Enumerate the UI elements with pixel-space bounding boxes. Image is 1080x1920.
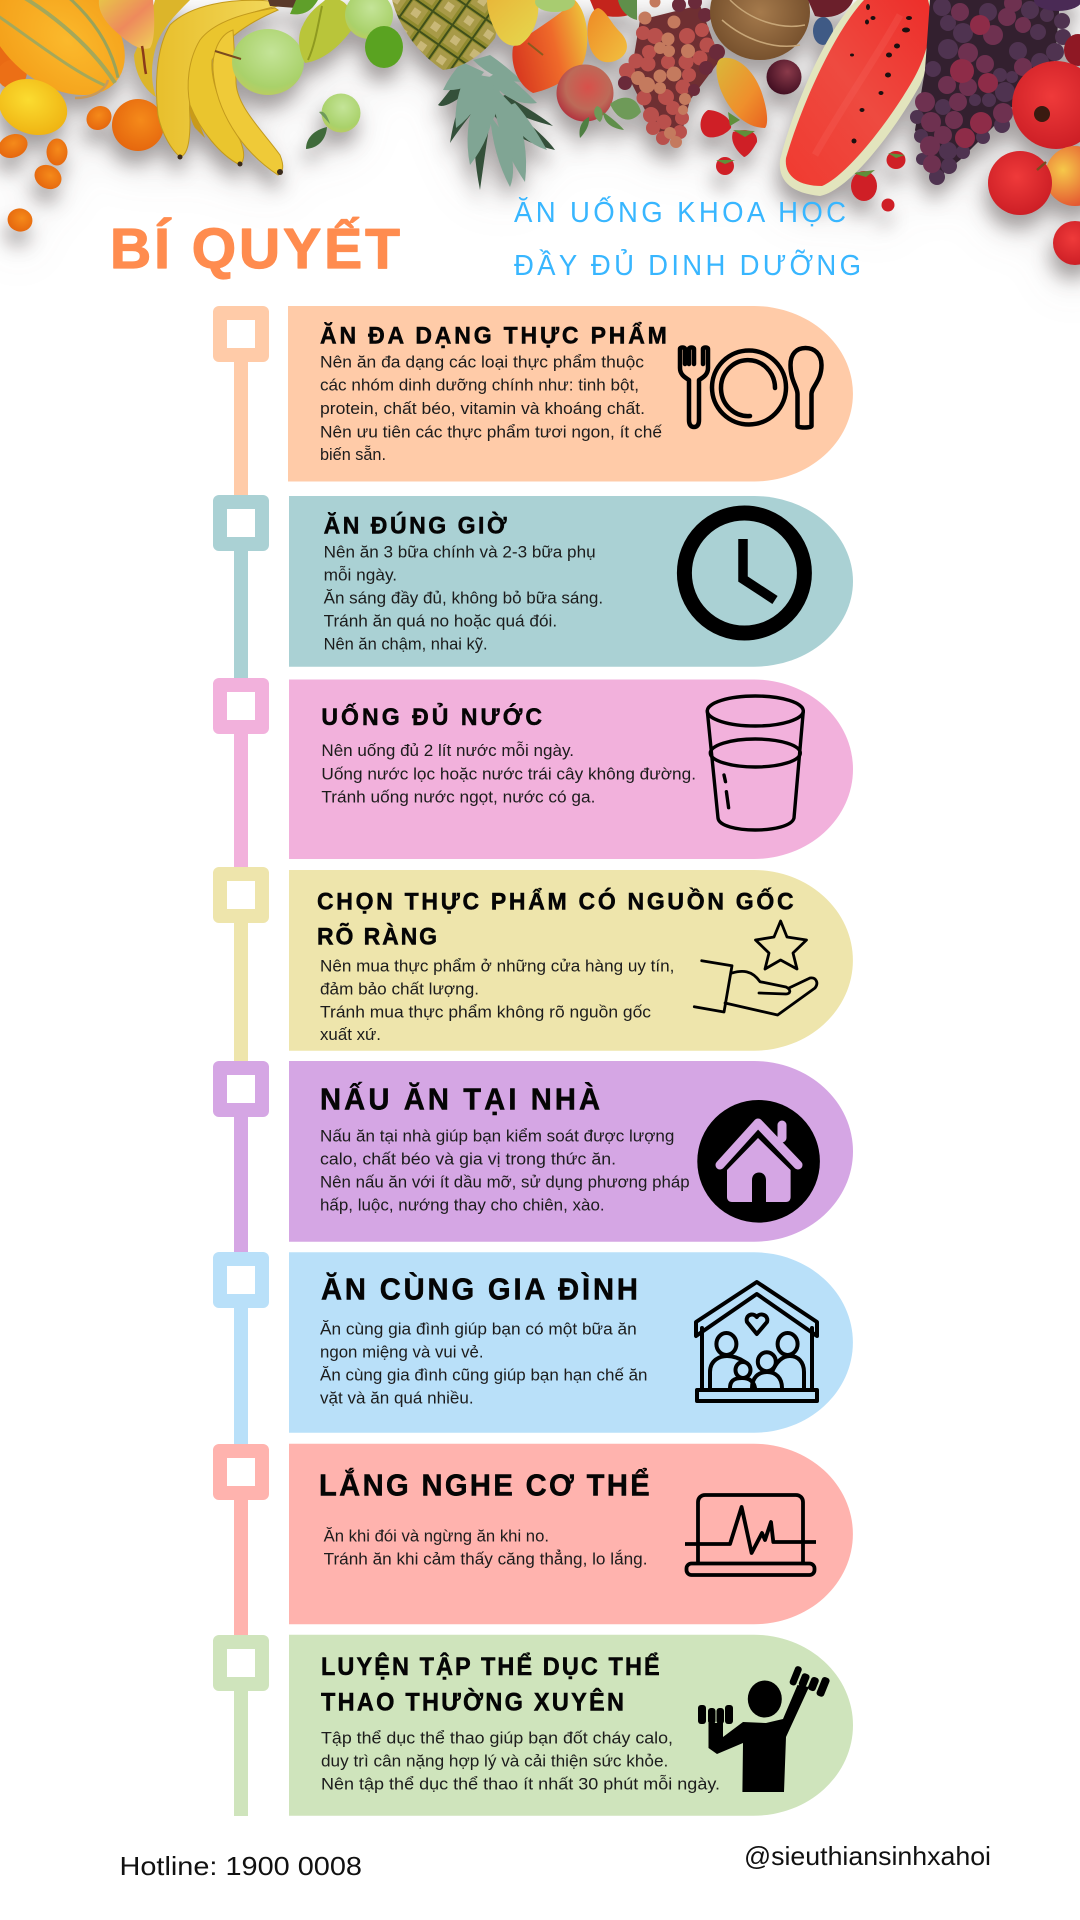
card background [288,306,853,482]
pomegranate and apples [1012,61,1080,149]
body text: mỗi ngày. [324,565,397,584]
body text: Uống nước lọc hoặc nước trái cây không đường. [321,764,696,783]
body text: Ăn cùng gia đình giúp bạn có một bữa ăn [320,1320,637,1339]
heading: ĂN ĐA DẠNG THỰC PHẨM [320,321,667,349]
strawberries [700,110,906,212]
body text: protein, chất béo, vitamin và khoáng chất. [320,399,645,418]
body text: Ăn sáng đầy đủ, không bỏ bữa sáng. [324,588,603,607]
body text [320,1320,648,1407]
heading: NẤU ĂN TẠI NHÀ [320,1081,600,1117]
card background [289,1061,853,1242]
dark grape cluster [910,0,1071,185]
icon: clock [684,513,804,633]
footer: hotline: Hotline: 1900 0008 [120,1851,362,1881]
card background [289,1635,853,1816]
body text: Nấu ăn tại nhà giúp bạn kiểm soát được lượng [320,1127,674,1146]
body text: calo, chất béo và gia vị trong thức ăn. [320,1150,616,1169]
body text: Tránh uống nước ngọt, nước có ga. [321,787,595,806]
icon: hand holding star [694,921,817,1015]
heading [321,1652,660,1717]
card background [289,1252,853,1433]
icon: laptop with heartbeat [685,1495,816,1575]
heading: THAO THƯỜNG XUYÊN [321,1688,624,1717]
body text: Ăn cùng gia đình cũng giúp bạn hạn chế ăn [320,1366,648,1385]
card background [289,1444,853,1624]
body text [321,741,696,806]
heading: RÕ RÀNG [317,922,437,950]
body text: Nên ăn chậm, nhai kỹ. [324,635,488,654]
icon: person lifting dumbbells [698,1665,831,1792]
body text: Nên ăn đa dạng các loại thực phẩm thuộc [320,352,645,371]
body text [320,957,674,1044]
panel: ăn đa dạng thực phẩm [288,306,853,482]
body text: đảm bảo chất lượng. [320,979,479,998]
heading: LUYỆN TẬP THỂ DỤC THỂ [321,1652,660,1681]
watermelon [780,0,934,196]
icon: glass of water [707,696,803,830]
body text: Nên mua thực phẩm ở những cửa hàng uy tín, [320,957,674,976]
heading: ĂN CÙNG GIA ĐÌNH [321,1271,638,1307]
body text: Tránh ăn quá no hoặc quá đói. [324,611,557,630]
panel: chọn thực phẩm có nguồn gốc rõ ràng [289,870,853,1051]
body text: Nên nấu ăn với ít dầu mỡ, sử dụng phương pháp [320,1173,690,1192]
body text: xuất xứ. [320,1025,381,1044]
body text: Nên tập thể dục thể thao ít nhất 30 phút mỗi ngày. [321,1774,720,1793]
heading: UỐNG ĐỦ NƯỚC [321,701,542,731]
panel: lắng nghe cơ thể [289,1444,853,1624]
card background [289,870,853,1051]
card background [289,680,853,859]
body text [324,542,603,654]
body text: biến sẵn. [320,445,386,464]
heading [317,887,794,950]
body text [320,352,663,464]
body text: duy trì cân nặng hợp lý và cải thiện sức khỏe. [321,1751,668,1770]
icon: house in circle [697,1100,820,1223]
pineapple crown [438,68,555,190]
heading: LẮNG NGHE CƠ THỂ [319,1468,650,1503]
body text: Nên uống đủ 2 lít nước mỗi ngày. [321,741,574,760]
panel: ăn đúng giờ [289,496,853,667]
panel: luyện tập thể dục thể thao thường xuyên [289,1635,853,1816]
icon: family in a house [696,1282,817,1401]
image: fresh fruit banner [0,0,1080,265]
body text: ngon miệng và vui vẻ. [320,1343,484,1362]
red grape cluster [618,0,725,148]
timeline: step markers and connectors [213,306,269,1816]
body text: các nhóm dinh dưỡng chính như: tinh bột, [320,376,639,395]
body text [321,1728,720,1793]
panel: nấu ăn tại nhà [289,1061,853,1242]
body text [320,1127,690,1215]
footer: social handle: @sieuthiansinhxahoi [744,1841,991,1871]
heading: ĂN ĐÚNG GIỜ [324,511,507,539]
panel: uống đủ nước [289,680,853,859]
card background [289,496,853,667]
body text: Nên ăn 3 bữa chính và 2-3 bữa phụ [324,542,596,561]
subtitle: ĂN UỐNG KHOA HỌC [514,195,846,228]
subtitle [514,195,861,281]
body text: Nên ưu tiên các thực phẩm tươi ngon, ít chế [320,422,663,441]
body text: Tập thể dục thể thao giúp bạn đốt cháy calo, [321,1728,673,1747]
heading: CHỌN THỰC PHẨM CÓ NGUỒN GỐC [317,887,794,915]
body text [324,1527,648,1568]
title: BÍ QUYẾT: BÍ QUYẾT [110,216,400,281]
body text: Ăn khi đói và ngừng ăn khi no. [324,1527,549,1546]
body text: Tránh ăn khi cảm thấy căng thẳng, lo lắng. [324,1549,648,1568]
body text: hấp, luộc, nướng thay cho chiên, xào. [320,1196,605,1215]
body text: Tránh mua thực phẩm không rõ nguồn gốc [320,1002,651,1021]
panel: ăn cùng gia đình [289,1252,853,1433]
subtitle: ĐẦY ĐỦ DINH DƯỠNG [514,248,861,281]
body text: vặt và ăn quá nhiều. [320,1388,474,1407]
icon: fork, plate, spoon [680,348,822,428]
